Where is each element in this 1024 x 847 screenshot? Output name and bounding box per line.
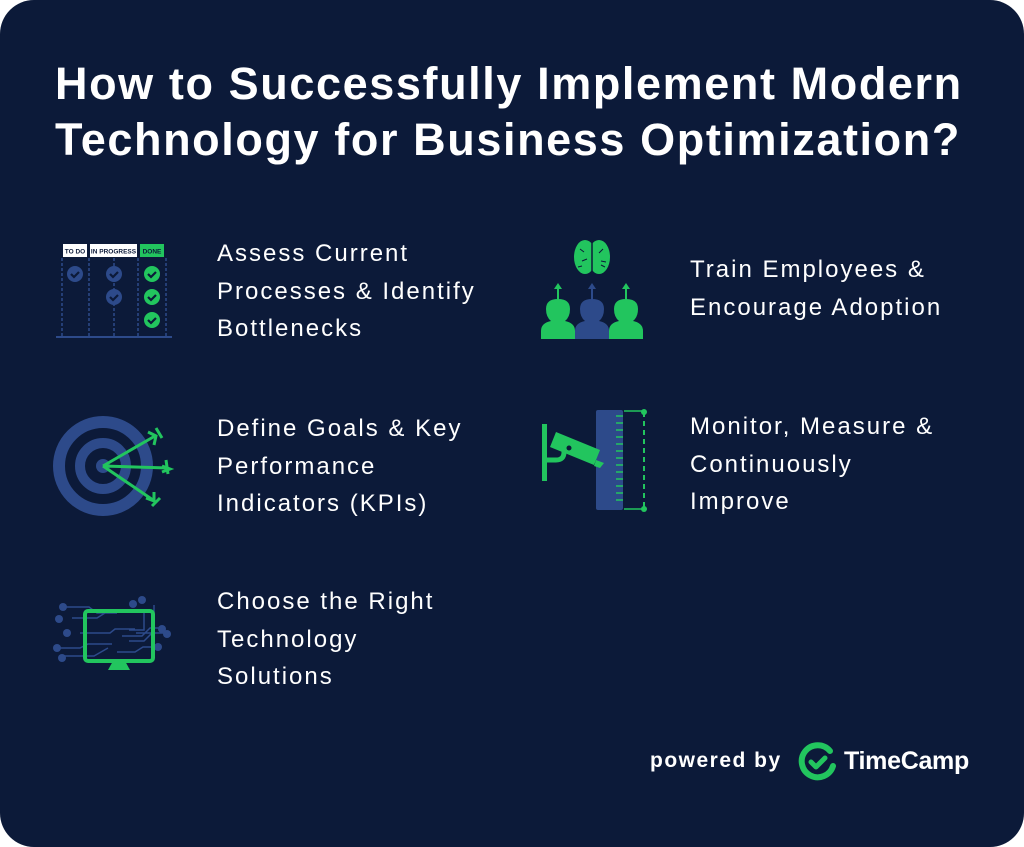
icon: target [53, 416, 174, 516]
text: train [690, 256, 942, 320]
text: train: Encourage Adoption [690, 294, 942, 320]
text: assess: Bottlenecks [217, 315, 363, 342]
text: define goals: Performance [217, 452, 376, 480]
text: choose: Choose the Right [217, 588, 434, 615]
text: monitor: Improve [690, 488, 791, 515]
title: How to Successfully Implement Modern [55, 58, 963, 109]
text: assess: Processes & Identify [217, 278, 476, 304]
text: define goals: Indicators (KPIs) [217, 490, 428, 517]
text: monitor: Continuously [690, 450, 853, 478]
icon: team brain [541, 240, 643, 339]
icon: kanban board: DONE [143, 248, 162, 256]
footer: powered by TimeCamp [650, 742, 969, 780]
text: choose: Solutions [217, 663, 334, 690]
footer: powered by TimeCamp: powered by [650, 749, 782, 772]
text: assess: Assess Current [217, 240, 409, 267]
footer: powered by TimeCamp: TimeCamp [844, 747, 969, 775]
text: monitor [690, 413, 934, 515]
icon: camera ruler [542, 409, 647, 512]
text: train: Train Employees & [690, 256, 926, 283]
icon: kanban board [56, 244, 172, 338]
icon: kanban board: TO DO [65, 248, 85, 256]
icon: timecamp logo [798, 742, 836, 780]
text: monitor: Monitor, Measure & [690, 413, 934, 440]
text: assess [217, 240, 476, 342]
text: choose [217, 588, 434, 690]
text: define goals [217, 415, 462, 517]
title: Technology for Business Optimization? [55, 114, 961, 165]
icon: kanban board: IN PROGRESS [91, 248, 137, 256]
text: define goals: Define Goals & Key [217, 415, 462, 442]
icon: monitor [53, 596, 171, 670]
text: choose: Technology [217, 626, 358, 652]
title [55, 58, 963, 165]
